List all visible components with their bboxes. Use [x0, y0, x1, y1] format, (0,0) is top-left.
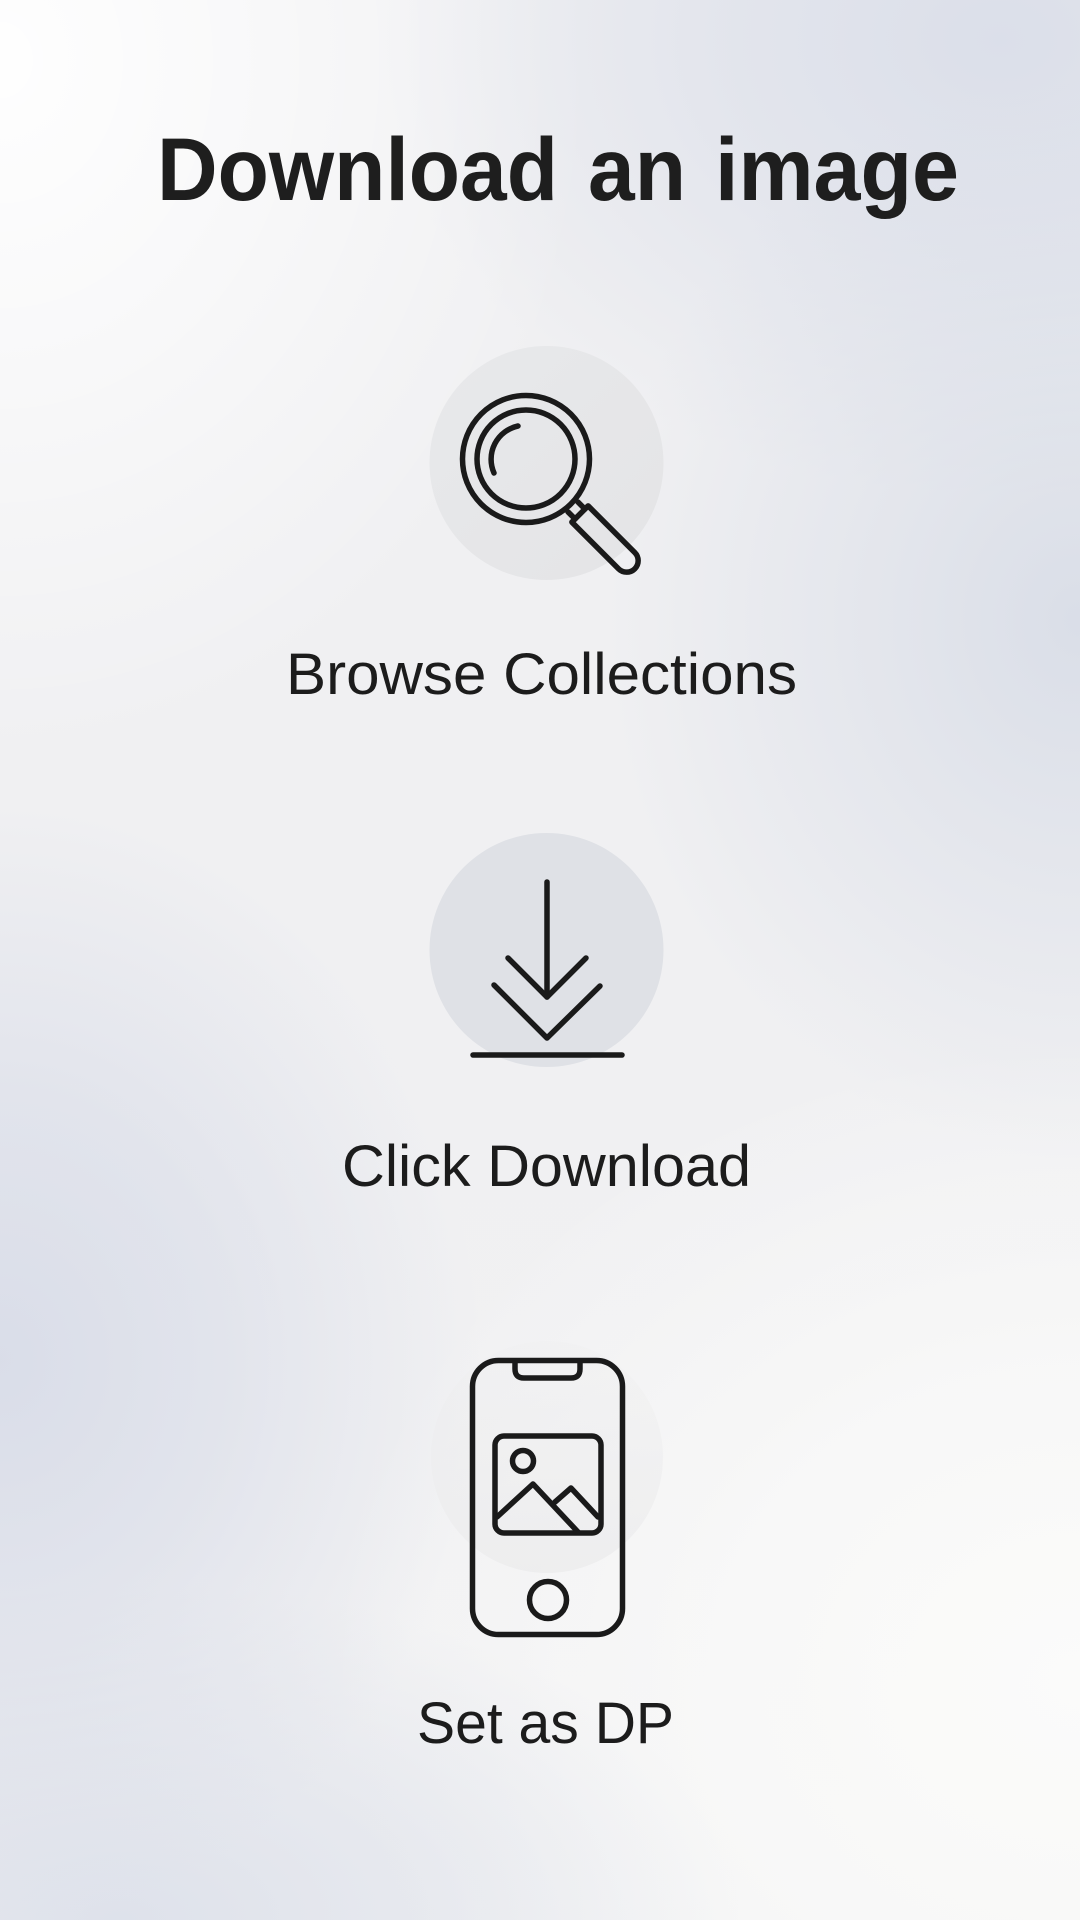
title: an: [588, 119, 686, 219]
step 3: set as dp: [417, 1341, 674, 1756]
title: [157, 119, 959, 219]
title: Download: [157, 119, 558, 219]
step 2: click download: [342, 833, 751, 1199]
title: image: [715, 119, 959, 219]
icon: magnifying glass: [430, 346, 664, 580]
label: click download: Click Download: [342, 1134, 751, 1199]
icon: phone with image: [431, 1341, 663, 1634]
label: browse collections: Browse Collections: [286, 642, 797, 707]
label: set as dp: Set as DP: [417, 1691, 674, 1756]
step 1: browse collections: [286, 346, 797, 707]
icon: download arrow: [430, 833, 664, 1067]
